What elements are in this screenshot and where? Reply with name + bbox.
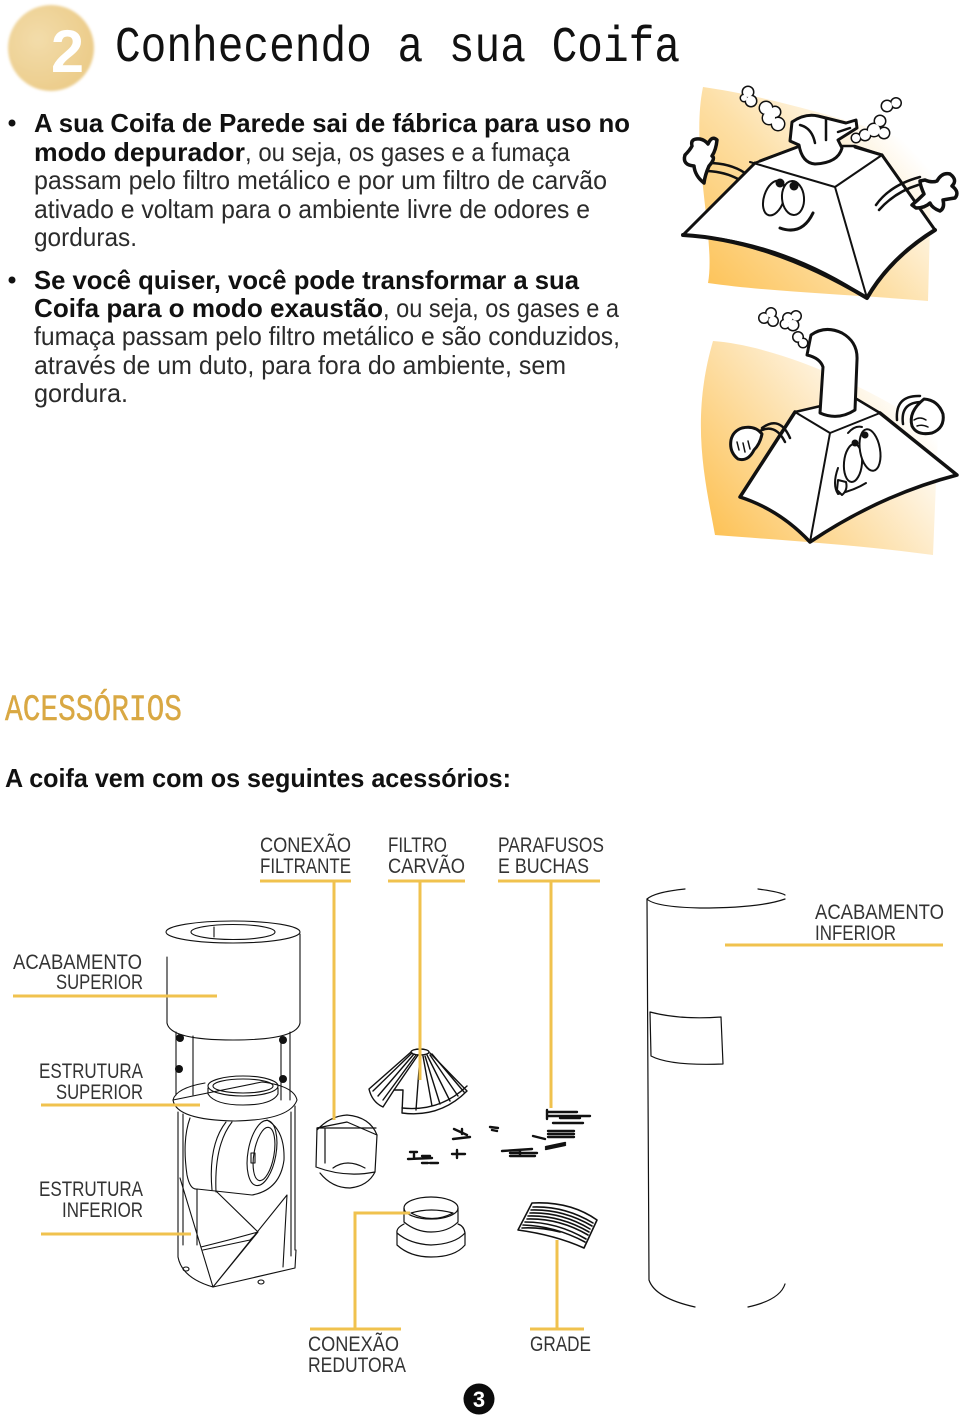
page number: [464, 1384, 494, 1414]
icon: left hand: [731, 423, 790, 460]
icon: smoke: [760, 308, 807, 347]
grille drawing: [518, 1203, 597, 1248]
icon: smoke left: [741, 87, 784, 130]
text block: modo exaustao: gordura.: [34, 378, 128, 408]
label: conexao filtrante: FILTRANTE: [260, 855, 351, 878]
label: estrutura inferior: ESTRUTURA: [39, 1178, 143, 1201]
label: conexao redutora: REDUTORA: [308, 1354, 406, 1377]
icon: right arm and hand: [876, 174, 957, 211]
label: grade: GRADE: [530, 1333, 591, 1356]
label: acabamento superior: ACABAMENTO: [13, 951, 142, 974]
text block: modo exaustao: Se você quiser, você pode transformar a sua: [34, 265, 580, 295]
label: filtro carvao: [388, 834, 465, 1080]
label: acabamento superior: SUPERIOR: [56, 971, 143, 994]
label: estrutura inferior: [39, 1178, 191, 1234]
label: conexao redutora: [308, 1213, 410, 1377]
text block: modo depurador: , ou seja, os gases e a fumaça: [245, 137, 570, 167]
text block: modo depurador: passam pelo filtro metálico e por um filtro de carvão: [34, 165, 607, 195]
label: estrutura superior: SUPERIOR: [56, 1081, 143, 1104]
chimney cap: [790, 115, 857, 164]
icon: smoke right: [852, 98, 900, 142]
label: filtro carvao: FILTRO: [388, 834, 447, 857]
hood body: [683, 146, 935, 298]
text block: modo exaustao: , ou seja, os gases e a: [383, 293, 619, 323]
heading: acessorios: ACESSÓRIOS: [5, 688, 182, 732]
text block: modo exaustao: [8, 265, 620, 408]
label: estrutura inferior: INFERIOR: [62, 1199, 143, 1222]
face: [835, 427, 883, 495]
label: grade: [530, 1240, 591, 1356]
section number badge: [8, 5, 94, 91]
text block: modo exaustao: fumaça passam pelo filtro metálico e são conduzidos,: [34, 321, 620, 351]
label: acabamento inferior: INFERIOR: [815, 922, 896, 945]
label: conexao filtrante: [260, 833, 351, 1120]
label: parafusos e buchas: E BUCHAS: [498, 855, 589, 878]
section number badge: 2: [51, 18, 84, 85]
text block: modo depurador: [8, 108, 630, 252]
text block: modo depurador: A sua Coifa de Parede sai de fábrica para uso no: [34, 108, 630, 138]
label: estrutura superior: ESTRUTURA: [39, 1060, 143, 1083]
screws and plugs: [408, 1110, 590, 1163]
text block: modo depurador: gorduras.: [34, 222, 137, 252]
duct: [807, 329, 857, 416]
outer finishing cylinder drawing: [647, 889, 785, 1307]
label: parafusos e buchas: [498, 834, 604, 1108]
face: [759, 178, 813, 230]
icon: right hand: [897, 396, 943, 434]
label: acabamento superior: [13, 951, 217, 996]
label: acabamento inferior: ACABAMENTO: [815, 901, 944, 924]
charcoal filter drawing: [369, 1049, 467, 1114]
label: filtro carvao: CARVÃO: [388, 854, 465, 878]
assembled structure drawing: [166, 921, 300, 1287]
title: Conhecendo a sua Coifa: [115, 20, 680, 77]
page number: 3: [473, 1387, 485, 1412]
text block: modo exaustao: através de um duto, para fora do ambiente, sem: [34, 350, 566, 380]
connector filter drawing: [316, 1115, 377, 1188]
label: estrutura superior: [39, 1060, 200, 1105]
text block: modo depurador: ativado e voltam para o ambiente livre de odores e: [34, 194, 590, 224]
label: parafusos e buchas: PARAFUSOS: [498, 834, 604, 857]
illustration: hood in recirculating mode: [683, 87, 957, 301]
text block: modo depurador: modo depurador: [34, 137, 245, 167]
subheading: A coifa vem com os seguintes acessórios:: [5, 763, 511, 793]
icon: left arm and hand: [684, 138, 745, 183]
label: conexao redutora: CONEXÃO: [308, 1332, 399, 1356]
label: acabamento inferior: [725, 901, 944, 945]
illustration: hood in exhaust mode: [701, 308, 957, 555]
label: conexao filtrante: CONEXÃO: [260, 833, 351, 857]
hood body: [740, 398, 957, 542]
text block: modo exaustao: Coifa para o modo exaustão: [34, 293, 383, 323]
reducer connection drawing: [397, 1197, 465, 1257]
